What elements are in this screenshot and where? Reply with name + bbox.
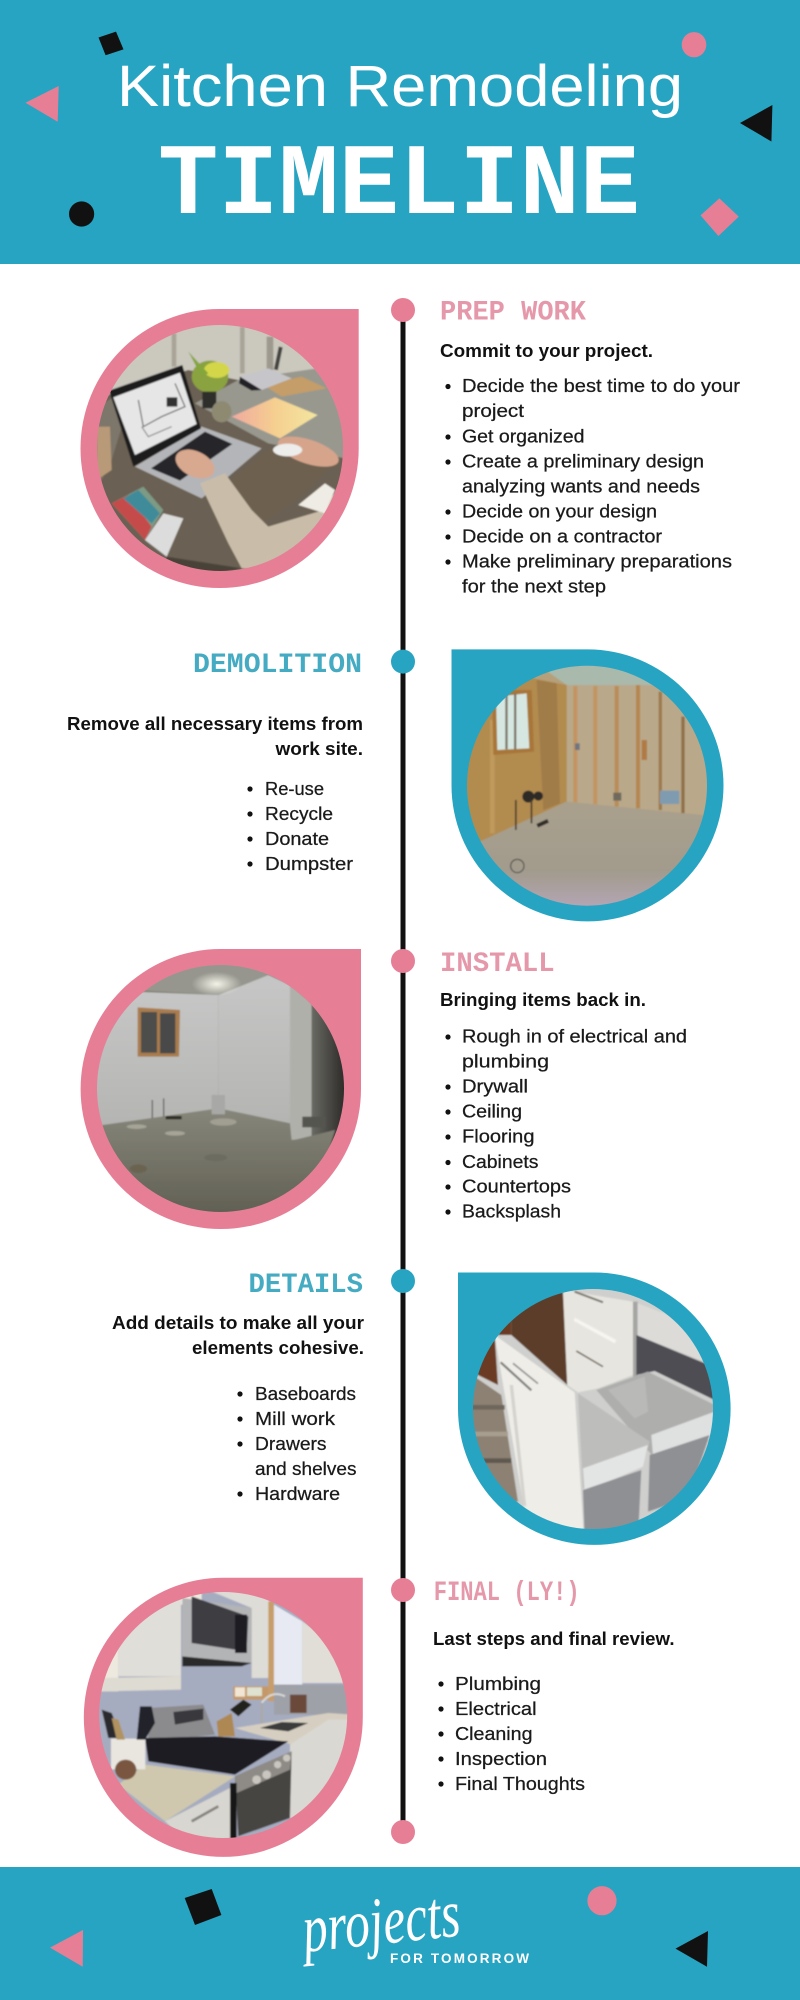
panel: install photo	[81, 949, 361, 1229]
lead sentence: Remove all necessary items from	[67, 714, 363, 734]
logo: for tomorrow: FOR TOMORROW	[390, 1951, 529, 1966]
text block: prep work	[440, 298, 740, 596]
icon: black square	[185, 1889, 221, 1925]
panel: demolition photo	[452, 649, 724, 921]
bullet list: Dumpster	[265, 854, 353, 874]
bullet list	[247, 779, 353, 874]
bullet list: Inspection	[455, 1749, 547, 1769]
icon: black circle	[69, 201, 94, 227]
bullet list: Ceiling	[462, 1102, 522, 1122]
title: Kitchen Remodeling: Kitchen Remodeling	[117, 54, 683, 119]
panel: prep work photo	[80, 309, 359, 588]
bullet list	[445, 376, 740, 596]
lead sentence: Bringing items back in.	[440, 990, 646, 1010]
bullet list: Mill work	[255, 1409, 336, 1429]
lead sentence	[67, 714, 363, 759]
bullet list: Decide on your design	[462, 502, 657, 522]
logo: projects: projects	[296, 1875, 464, 1967]
bullet list: Recycle	[265, 804, 333, 824]
bullet list: analyzing wants and needs	[462, 476, 700, 496]
heading: details: DETAILS	[248, 1270, 363, 1301]
lead sentence: Commit to your project.	[440, 341, 653, 361]
bullet list: and shelves	[255, 1459, 356, 1479]
timeline dot 3	[391, 949, 415, 973]
text block: demolition	[67, 650, 363, 874]
bullet list: Drawers	[255, 1434, 326, 1454]
bullet list: Decide the best time to do your	[462, 376, 740, 396]
bullet list: Re-use	[265, 779, 324, 799]
bullet list: project	[462, 401, 524, 421]
icon: pink triangle	[26, 86, 59, 122]
bullet list: Make preliminary preparations	[462, 552, 732, 572]
bullet list: Cabinets	[462, 1152, 538, 1172]
timeline dot 1	[391, 298, 415, 322]
icon: pink circle	[682, 32, 706, 57]
bullet list: Drywall	[462, 1076, 528, 1096]
bullet list: Electrical	[455, 1699, 537, 1719]
bullet list: Baseboards	[255, 1384, 356, 1404]
footer banner	[0, 1867, 800, 2000]
bullet list: Countertops	[462, 1176, 571, 1196]
icon: pink circle	[587, 1886, 617, 1915]
bullet list: Donate	[265, 829, 329, 849]
panel: final photo	[84, 1578, 363, 1857]
heading: demolition: DEMOLITION	[193, 650, 362, 681]
bullet list: plumbing	[462, 1052, 549, 1072]
timeline dot 5	[391, 1578, 415, 1602]
lead sentence: Last steps and final review.	[433, 1629, 674, 1649]
heading: final(ly!): FINAL (LY!)	[434, 1578, 580, 1609]
lead sentence	[112, 1313, 364, 1358]
bullet list: Final Thoughts	[455, 1774, 585, 1794]
text block: final	[433, 1578, 674, 1794]
text block: install	[440, 949, 687, 1222]
bullet list: Get organized	[462, 426, 584, 446]
bullet list	[438, 1674, 585, 1794]
header banner	[0, 0, 800, 264]
text block: details	[112, 1270, 364, 1504]
bullet list: Hardware	[255, 1484, 340, 1504]
panel: details photo	[458, 1272, 731, 1545]
lead sentence: elements cohesive.	[192, 1338, 364, 1358]
bullet list	[237, 1384, 356, 1504]
bullet list: Plumbing	[455, 1674, 541, 1694]
timeline dot 4	[391, 1269, 415, 1293]
bullet list: Cleaning	[455, 1724, 532, 1744]
timeline end dot	[391, 1820, 415, 1844]
bullet list	[445, 1026, 687, 1222]
heading: prep work: PREP WORK	[440, 298, 586, 328]
bullet list: Decide on a contractor	[462, 526, 662, 546]
timeline spine	[391, 298, 415, 1844]
bullet list: Create a preliminary design	[462, 452, 704, 472]
lead sentence: Add details to make all your	[112, 1313, 364, 1333]
icon: black triangle	[676, 1931, 708, 1967]
lead sentence: work site.	[274, 739, 363, 759]
icon: pink triangle	[50, 1930, 83, 1967]
icon: black triangle	[740, 105, 772, 142]
icon: black square	[98, 32, 124, 55]
heading: install: INSTALL	[440, 949, 555, 980]
title: TIMELINE: TIMELINE	[158, 130, 640, 244]
icon: pink diamond	[700, 198, 739, 236]
bullet list: Rough in of electrical and	[462, 1026, 687, 1046]
bullet list: Flooring	[462, 1126, 534, 1146]
bullet list: Backsplash	[462, 1202, 561, 1222]
timeline dot 2	[391, 650, 415, 674]
bullet list: for the next step	[462, 576, 606, 596]
